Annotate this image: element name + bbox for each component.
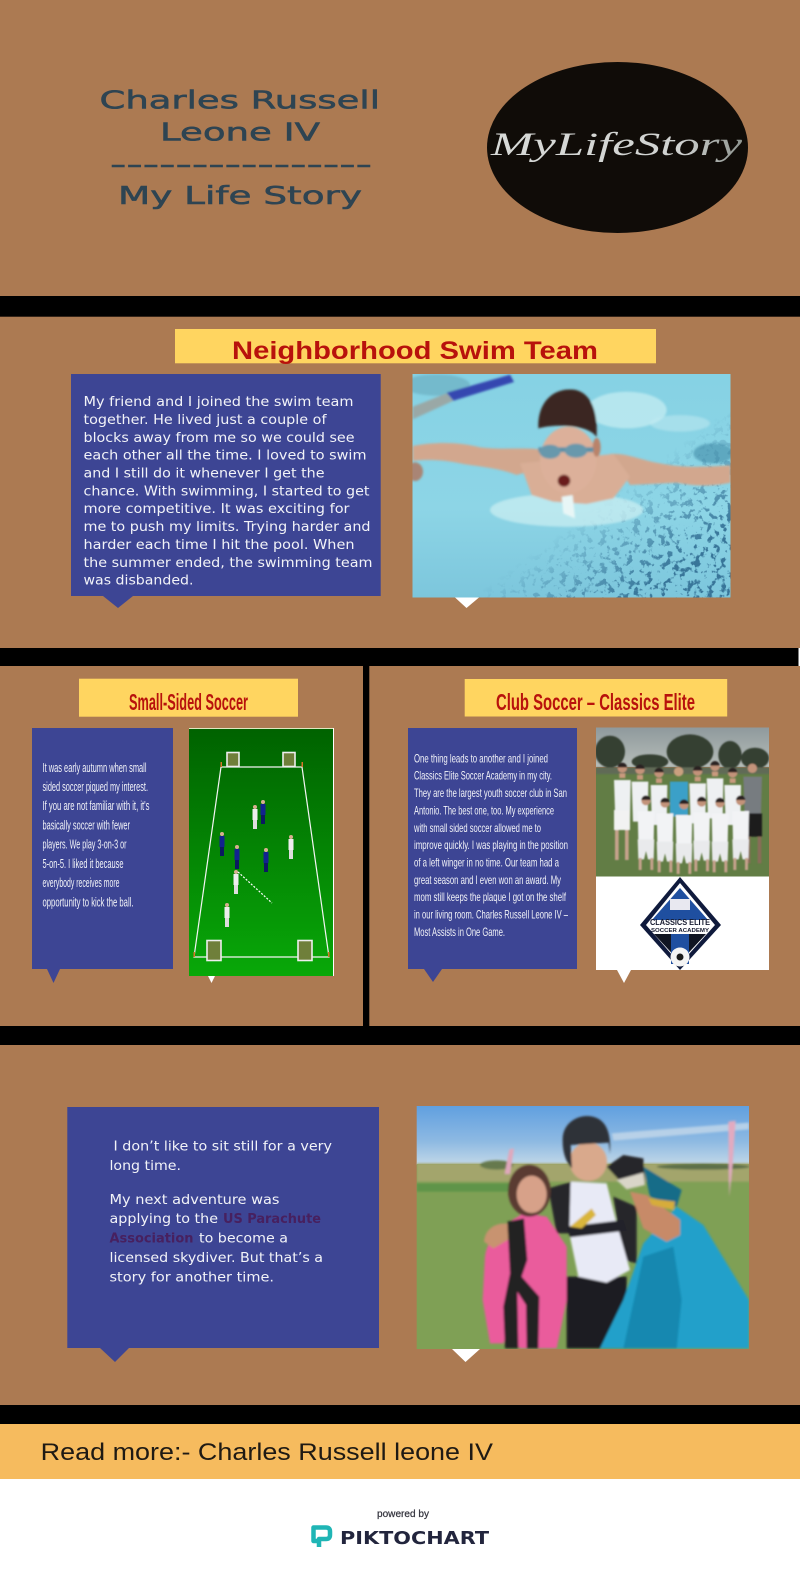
footer: piktochart branding: PIKTOCHART bbox=[340, 1528, 490, 1549]
text block: club story: One thing leads to another and I joined bbox=[414, 752, 548, 766]
pointer: swim photo bbox=[455, 598, 479, 608]
pointer: team photo bbox=[617, 970, 631, 983]
footer: read more band: Read more:- Charles Russell leone IV bbox=[41, 1439, 494, 1466]
text block: club story: Antonio. The best one, too. My experience bbox=[414, 804, 554, 818]
text block: small-sided story: 5-on-5. I liked it because bbox=[42, 856, 124, 871]
title: My Life Story bbox=[118, 181, 362, 210]
text block: club story: Classics Elite Soccer Academy in my city. bbox=[414, 768, 552, 782]
text block: club story: improve quickly. I was playing in the position bbox=[414, 838, 568, 852]
text block: skydiving story: to become a bbox=[199, 1232, 288, 1246]
text block: swim story: more competitive. It was exciting for bbox=[84, 502, 350, 517]
text block: skydiving story: story for another time. bbox=[110, 1270, 274, 1286]
text block: club story: great season and I even won an award. My bbox=[414, 873, 561, 887]
heading: small-sided soccer bbox=[79, 679, 298, 717]
text block: skydiving story: US Parachute bbox=[223, 1212, 321, 1227]
text block: small-sided story: If you are not familiar with it, it's bbox=[42, 798, 150, 813]
logo: Classics Elite Soccer Academy bbox=[596, 876, 769, 970]
photo: swimmer bbox=[400, 360, 740, 610]
logo: Classics Elite Soccer Academy: SOCCER ACADEMY bbox=[651, 928, 710, 934]
text block: swim story: chance. With swimming, I started to get bbox=[84, 484, 370, 500]
text block: small-sided story: It was early autumn when small bbox=[42, 760, 147, 775]
text block: small-sided story bbox=[32, 728, 173, 983]
title: Charles Russell bbox=[100, 86, 380, 114]
text block: swim story: me to push my limits. Trying harder and bbox=[84, 520, 370, 535]
diagram: soccer field bbox=[189, 728, 334, 976]
text block: club story: mom still keeps the plaque I got on the shelf bbox=[414, 890, 566, 904]
text block: club story: of a left winger in no time. Our team had a bbox=[414, 856, 559, 870]
text block: skydiving story: applying to the bbox=[110, 1212, 218, 1227]
footer: piktochart branding bbox=[314, 1508, 490, 1549]
pointer: skydive photo bbox=[452, 1349, 480, 1362]
text block: swim story: blocks away from me so we could see bbox=[84, 431, 354, 446]
text block: club story: They are the largest youth soccer club in San bbox=[414, 786, 567, 800]
heading: small-sided soccer: Small-Sided Soccer bbox=[129, 689, 248, 715]
text block: skydiving story: Association bbox=[110, 1232, 194, 1246]
text block: small-sided story: basically soccer with fewer bbox=[42, 818, 130, 832]
text block: skydiving story bbox=[67, 1107, 379, 1362]
pointer: field diagram bbox=[208, 976, 215, 983]
photo: skydivers bbox=[416, 1105, 750, 1350]
text block: club story: with small sided soccer allowed me to bbox=[413, 821, 541, 835]
heading: swim team: Neighborhood Swim Team bbox=[232, 337, 598, 365]
panel: header bbox=[100, 62, 748, 233]
text block: small-sided story: sided soccer piqued my interest. bbox=[42, 779, 148, 794]
heading: club soccer: Club Soccer – Classics Elite bbox=[496, 689, 695, 715]
heading: swim team bbox=[175, 329, 656, 365]
title: ---------------- bbox=[110, 150, 372, 179]
text block: skydiving story: licensed skydiver. But that’s a bbox=[110, 1251, 323, 1266]
text block: club story bbox=[408, 728, 577, 982]
text block: club story: in our living room. Charles Russell Leone IV – bbox=[414, 908, 568, 922]
panel: neighborhood swim team bbox=[71, 329, 740, 610]
text block: swim story: the summer ended, the swimming team bbox=[84, 556, 372, 571]
photo: team bbox=[595, 727, 769, 877]
text block: swim story: and I still do it whenever I get the bbox=[84, 466, 324, 482]
text block: swim story: together. He lived just a couple of bbox=[84, 413, 327, 428]
text block: swim story: My friend and I joined the swim team bbox=[84, 395, 354, 410]
heading: club soccer bbox=[465, 679, 727, 716]
text block: skydiving story: I don’t like to sit still for a very bbox=[114, 1140, 332, 1154]
panel: club soccer bbox=[408, 679, 769, 983]
logo: MyLifeStory oval bbox=[487, 62, 748, 233]
text block: small-sided story: players. We play 3-on-3 or bbox=[42, 836, 127, 852]
text block: small-sided story: opportunity to kick the ball. bbox=[42, 894, 134, 910]
logo: MyLifeStory oval: MyLifeStory bbox=[489, 127, 743, 163]
title bbox=[100, 86, 380, 210]
panel: small-sided soccer bbox=[32, 679, 334, 983]
logo: Classics Elite Soccer Academy: CLASSICS ELITE bbox=[650, 917, 710, 927]
panel: skydiving bbox=[67, 1105, 750, 1362]
text block: club story: Most Assists in One Game. bbox=[414, 925, 505, 939]
title: Leone IV bbox=[160, 118, 320, 146]
icon: piktochart mark bbox=[314, 1528, 330, 1547]
text block: swim story bbox=[71, 374, 381, 608]
text block: skydiving story: My next adventure was bbox=[110, 1193, 280, 1208]
text block: swim story: harder each time I hit the pool. When bbox=[84, 538, 354, 553]
footer: piktochart branding: powered by bbox=[377, 1508, 430, 1520]
text block: swim story: each other all the time. I loved to swim bbox=[84, 448, 366, 464]
text block: swim story: was disbanded. bbox=[84, 574, 194, 588]
footer: read more band bbox=[0, 1424, 800, 1479]
text block: small-sided story: everybody receives more bbox=[42, 875, 120, 890]
text block: skydiving story: long time. bbox=[110, 1159, 181, 1174]
